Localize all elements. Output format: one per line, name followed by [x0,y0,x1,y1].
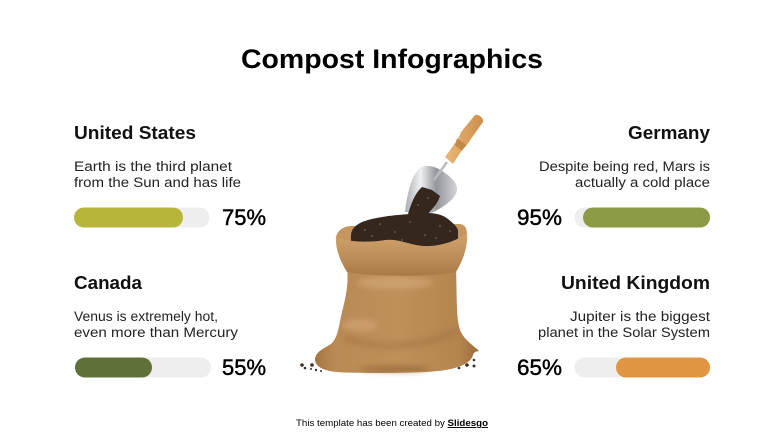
heading: United Kingdom: United Kingdom [561,272,710,293]
text block: Germany description: Despite being red, Mars is [539,159,710,174]
icon: compost soil [351,187,458,248]
icon: compost sack with trowel [300,115,483,373]
bar fill: Germany 95% [583,208,710,228]
scattered soil [300,359,476,372]
text block: Canada description: Venus is extremely hot, [74,309,218,324]
percentage: 95%: 95% [517,205,562,230]
percentage: 65%: 65% [517,355,562,380]
title: Compost Infographics [241,44,543,74]
icon: sack rim back [336,224,467,250]
percentage: 55%: 55% [222,355,266,380]
bar track: United States [74,208,210,228]
bar fill: United Kingdom 65% [616,358,710,378]
footer credit: This template has been created by Slidesgo [296,418,488,429]
folds [357,277,433,289]
bar track: Canada [75,358,211,378]
bar track: United Kingdom [574,358,710,378]
heading: United States: United States [74,122,196,143]
panel: Canada [74,272,266,380]
text block: United States description: Earth is the third planet [74,159,232,174]
heading: Canada: Canada [74,272,143,293]
bar fill: United States 75% [74,208,183,228]
text block: United Kingdom description: Jupiter is the biggest [570,309,710,324]
text block: United Kingdom description: planet in the Solar System [538,325,710,340]
bar fill: Canada 55% [75,358,152,378]
text block: Canada description: even more than Mercury [74,325,238,340]
bar track: Germany [574,208,710,228]
text block: Germany description: actually a cold place [575,175,710,190]
icon: sack rim front [336,233,467,276]
icon: trowel [405,115,483,213]
percentage: 75%: 75% [222,205,266,230]
text block: United States description: from the Sun and has life [74,175,241,190]
panel: United States [74,122,266,230]
panel: Germany [517,122,711,230]
panel: United Kingdom [517,272,710,380]
icon: sack body [315,268,479,373]
heading: Germany: Germany [628,122,711,143]
